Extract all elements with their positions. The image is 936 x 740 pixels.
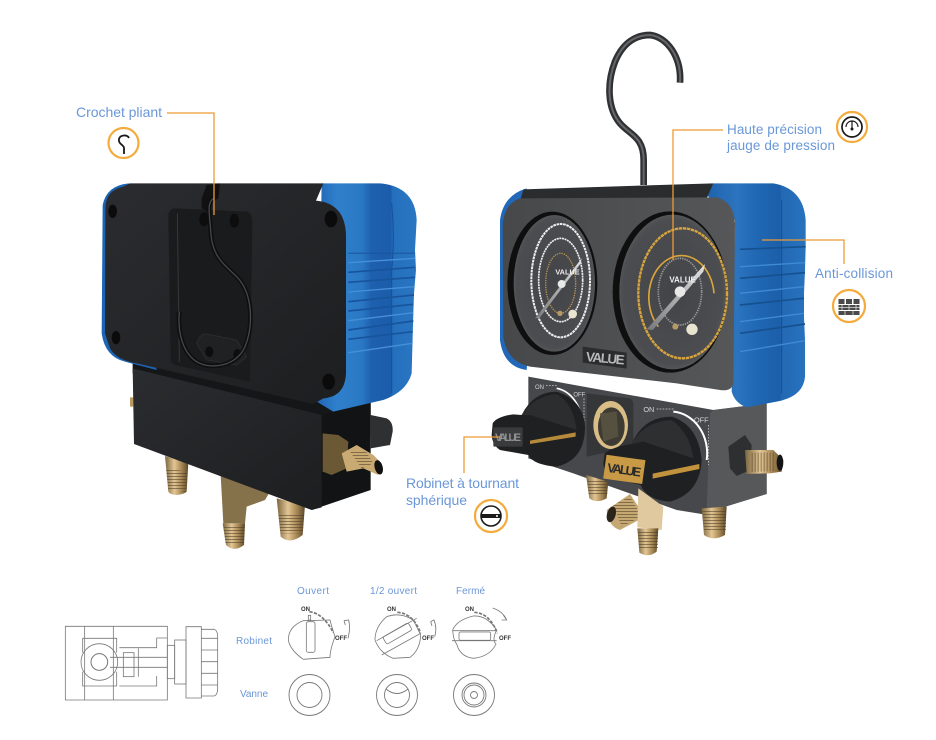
label: jauge de pression (726, 138, 835, 153)
brass fitting bottom left (165, 456, 188, 495)
manifold block: OFF (573, 393, 586, 399)
blue bumper left (500, 188, 533, 370)
top edge (520, 183, 713, 202)
center brass port (593, 401, 628, 449)
manifold block: VALUE (606, 461, 642, 480)
knob scale labels: ON (301, 607, 310, 613)
elbow fitting (605, 488, 663, 555)
knob scale labels: OFF (422, 636, 434, 642)
valve cross-section drawing (65, 626, 218, 700)
rear plate (105, 183, 346, 404)
hook (609, 35, 680, 185)
leader line (464, 437, 500, 473)
brass elbow fitting (221, 475, 270, 549)
folded hook (179, 198, 250, 366)
knob: closed (452, 608, 507, 658)
icon: hook (108, 128, 138, 158)
valve: open (289, 674, 330, 716)
scale right knob (657, 409, 708, 465)
notch at top (202, 183, 220, 212)
hook recess (168, 208, 252, 382)
callout: robinet a tournant spherique (406, 437, 519, 532)
row heading: vanne: Vanne (240, 689, 268, 700)
knob scale labels: ON (465, 607, 474, 613)
fitting right (728, 435, 752, 476)
manifold block: ON (535, 385, 544, 391)
callout: haute precision (673, 112, 867, 260)
knob scale labels (301, 607, 511, 642)
product: manifold rear view (102, 183, 417, 549)
brass fitting right (323, 433, 384, 475)
product: manifold front view (492, 35, 806, 555)
knob scale labels: ON (387, 607, 396, 613)
label: sphérique (406, 492, 467, 508)
icon: bricks (833, 290, 865, 322)
table: valve positions (236, 586, 511, 716)
gauge housing (500, 183, 806, 407)
blue bumper right (707, 183, 806, 407)
manifold block: ON (643, 405, 654, 414)
label: Crochet pliant (76, 104, 162, 120)
faceplate logo: VALUE (585, 349, 625, 368)
column heading: ferme: Fermé (456, 586, 485, 597)
label: Anti-collision (815, 266, 893, 281)
faceplate (503, 197, 735, 390)
label: Haute précision (727, 122, 822, 137)
left gauge (507, 212, 597, 355)
row heading: robinet: Robinet (236, 636, 272, 647)
manifold block (492, 377, 783, 555)
knob: half open (375, 612, 436, 658)
logo right knob (603, 455, 645, 484)
logo left knob (493, 427, 523, 447)
manifold block: OFF (694, 416, 709, 425)
knob: open (288, 612, 350, 659)
column heading: ouvert: Ouvert (297, 586, 329, 597)
scale left knob (546, 386, 584, 430)
gauge logos: VALUE (555, 267, 580, 276)
icon: gauge (837, 112, 867, 142)
callout: crochet pliant (76, 104, 214, 215)
bottom fittings (586, 475, 608, 501)
left knob (492, 392, 585, 467)
blue bumper right (314, 183, 417, 412)
right knob (603, 417, 702, 502)
manifold block side (312, 402, 371, 510)
manifold block: VALUE (495, 432, 521, 444)
leader line (167, 113, 214, 215)
callout: anti-collision (762, 240, 893, 322)
column heading: 1/2 ouvert: 1/2 ouvert (370, 586, 417, 597)
leader line (673, 130, 723, 260)
brass fitting bottom right (277, 498, 305, 540)
leader line (762, 240, 844, 264)
gauge housing: VALUE (669, 276, 696, 285)
filler behind plate (133, 360, 371, 437)
small brass back fitting (130, 397, 133, 407)
blue bumper left (102, 183, 157, 370)
valve: closed (454, 674, 494, 716)
label: Robinet à tournant (406, 475, 519, 491)
right gauge (613, 211, 727, 373)
knob scale labels: OFF (499, 636, 511, 642)
knob scale labels: OFF (335, 636, 347, 642)
manifold block front (133, 368, 322, 510)
valve: half open (376, 674, 418, 716)
icon: ball valve (475, 500, 507, 532)
screw holes (108, 205, 337, 390)
rear knob handle (371, 415, 393, 448)
